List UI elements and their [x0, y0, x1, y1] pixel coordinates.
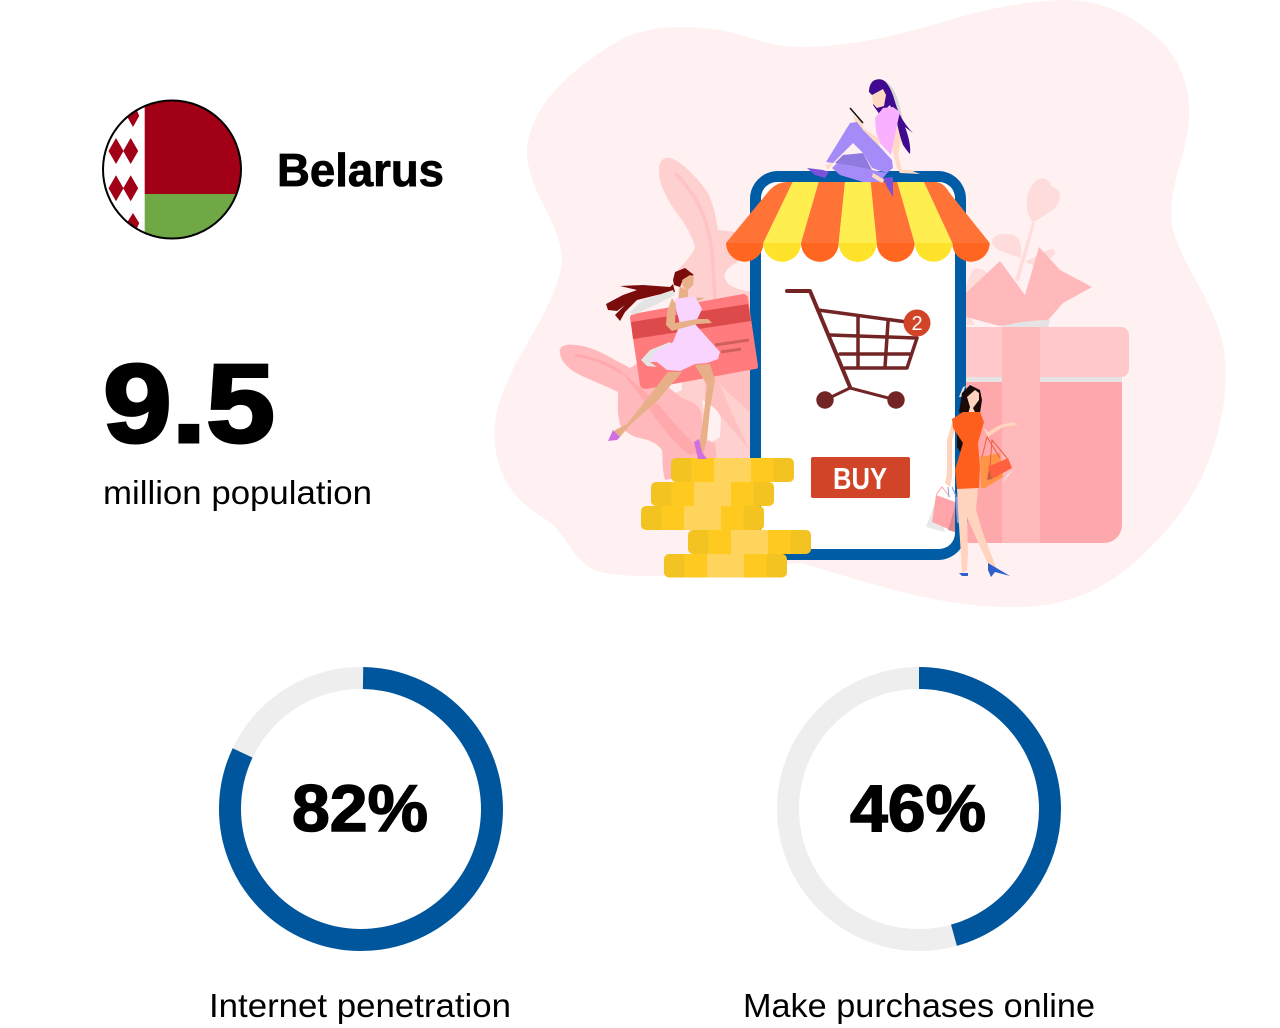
donut chart: internet penetration: 82% — [292, 771, 428, 845]
donut chart: online purchases: 46% — [850, 771, 986, 845]
illustration: online shopping — [494, 0, 1226, 607]
buy button — [811, 457, 910, 498]
smartphone — [750, 171, 966, 560]
donut chart: online purchases — [788, 678, 1050, 940]
woman sitting on phone — [807, 79, 920, 197]
flag: Belarus — [100, 98, 245, 244]
country name: Belarus — [277, 144, 444, 196]
buy button: BUY — [833, 461, 887, 496]
gift box — [960, 247, 1129, 543]
label: online purchases: Make purchases online — [743, 987, 1095, 1024]
population label: million population — [103, 474, 372, 511]
cart badge — [904, 310, 930, 336]
cart badge: 2 — [911, 313, 923, 335]
shop awning — [726, 182, 990, 262]
population figure: 9.5 — [103, 342, 275, 466]
background blob — [494, 0, 1226, 607]
coin stack — [641, 458, 811, 578]
shopping cart — [787, 291, 917, 409]
label: internet penetration: Internet penetration — [209, 987, 511, 1024]
donut chart: internet penetration — [228, 676, 494, 942]
background plants — [560, 158, 760, 480]
woman with shopping bags — [926, 383, 1018, 577]
woman holding credit card — [606, 268, 758, 459]
hearts and stems behind gift — [966, 178, 1060, 325]
